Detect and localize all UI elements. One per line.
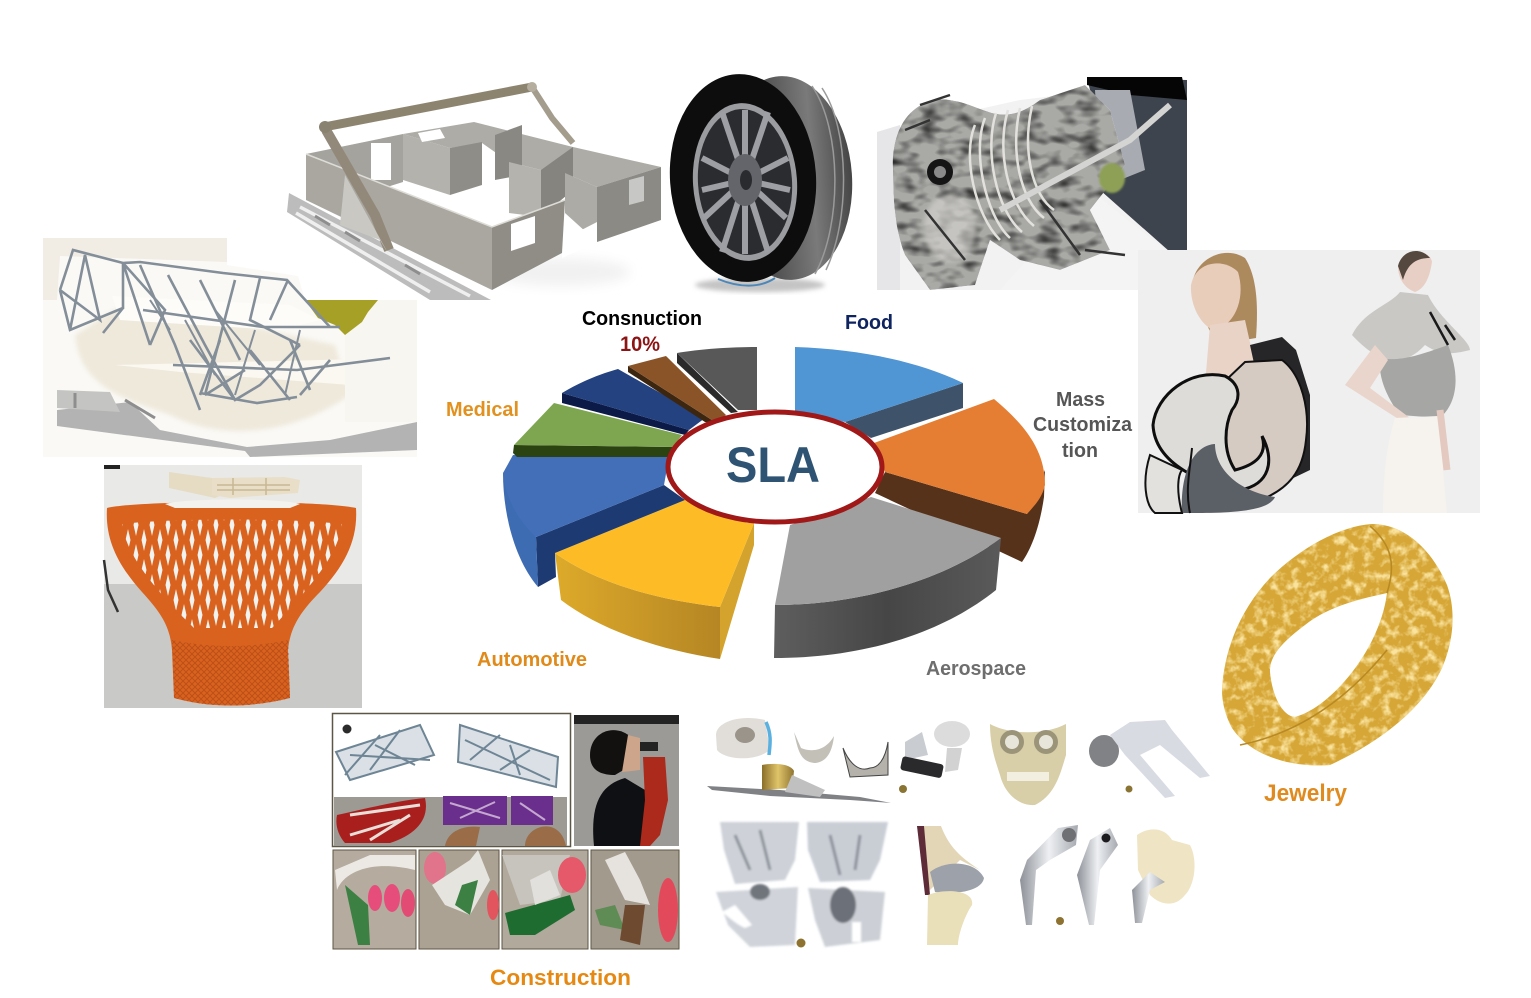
slice: navy — [562, 369, 705, 435]
label: Mass Customization: tion — [1062, 440, 1098, 462]
sub-panel: bone cast photo 4 — [591, 850, 679, 949]
implant: beige skull — [990, 724, 1066, 805]
implant: small skull with blue guide — [716, 718, 770, 758]
label: Automotive: Automotive — [477, 649, 587, 671]
slice: Medical green — [513, 403, 682, 457]
implant: knee joint — [917, 826, 984, 945]
label: 10%: 10% — [620, 333, 660, 356]
label: Jewelry: Jewelry — [1264, 780, 1348, 807]
panel: mass customization fashion photo — [1138, 250, 1480, 513]
label: Medical: Medical — [446, 399, 519, 421]
implant: hip stem right — [1077, 828, 1118, 925]
figure: right model — [1345, 251, 1470, 513]
sub-panel: bone cast photo 2 — [419, 850, 499, 949]
panel: automotive / wearable cast photos — [332, 714, 679, 949]
label: Mass Customization — [1033, 389, 1133, 462]
sub-panel: boy wearing cast — [574, 715, 679, 846]
photo: gold jewelry ring — [1222, 524, 1453, 765]
label: Construction: Construction — [490, 965, 631, 990]
implant: knee tibial — [900, 721, 970, 778]
figure: left model — [1145, 253, 1310, 513]
panel: construction truss model photo — [43, 238, 417, 457]
photo: 3D printed house with gantry — [287, 82, 661, 300]
implant: jaw scans — [716, 822, 888, 947]
centre label: SLA: SLA — [726, 437, 820, 493]
label: Consnuction: Consnuction — [582, 308, 702, 330]
icon: gold reference dot 1 — [899, 785, 907, 793]
label: Mass Customization: Customiza — [1033, 414, 1133, 436]
pie chart: SLA application shares — [503, 347, 1045, 659]
implant: white hip prosthesis — [1089, 720, 1210, 798]
slice: Food — [795, 347, 963, 438]
slice: Mass Customization — [874, 399, 1045, 562]
stool house model — [165, 472, 300, 508]
white background of central pie image — [300, 300, 1138, 705]
panel: medical implants photos — [707, 718, 1210, 948]
implant: femur with stem — [1132, 829, 1195, 923]
sub-panel: bone cast photo 1 — [333, 850, 416, 949]
label: Food: Food — [845, 312, 893, 334]
slice: Construction brown — [628, 356, 726, 422]
implant: mandible plate — [843, 742, 888, 777]
panel: orange lattice stool photo — [100, 465, 362, 708]
icon: gold reference dot 4 — [1056, 917, 1064, 925]
icon: gold reference dot 3 — [796, 938, 806, 948]
label: Aerospace: Aerospace — [926, 658, 1026, 680]
photo: car wheel — [663, 69, 859, 292]
photo: aircraft engine cutaway — [877, 77, 1187, 290]
slice: dark gray — [677, 347, 757, 413]
implant: jaw cup — [794, 732, 834, 763]
centre ellipse — [668, 412, 882, 522]
implant: brass rod — [707, 764, 891, 803]
label: Mass Customization: Mass — [1056, 389, 1105, 411]
sub-panel: lattice casts — [332, 714, 570, 846]
slice: Aerospace — [774, 497, 1001, 658]
implant: hip stem left — [1020, 825, 1078, 925]
slice: Automotive — [555, 500, 754, 659]
stool body — [107, 502, 356, 706]
slice: Machinery blue — [503, 455, 685, 587]
icon: gold reference dot 2 — [1126, 786, 1132, 792]
sub-panel: bone cast photo 3 — [502, 850, 588, 949]
